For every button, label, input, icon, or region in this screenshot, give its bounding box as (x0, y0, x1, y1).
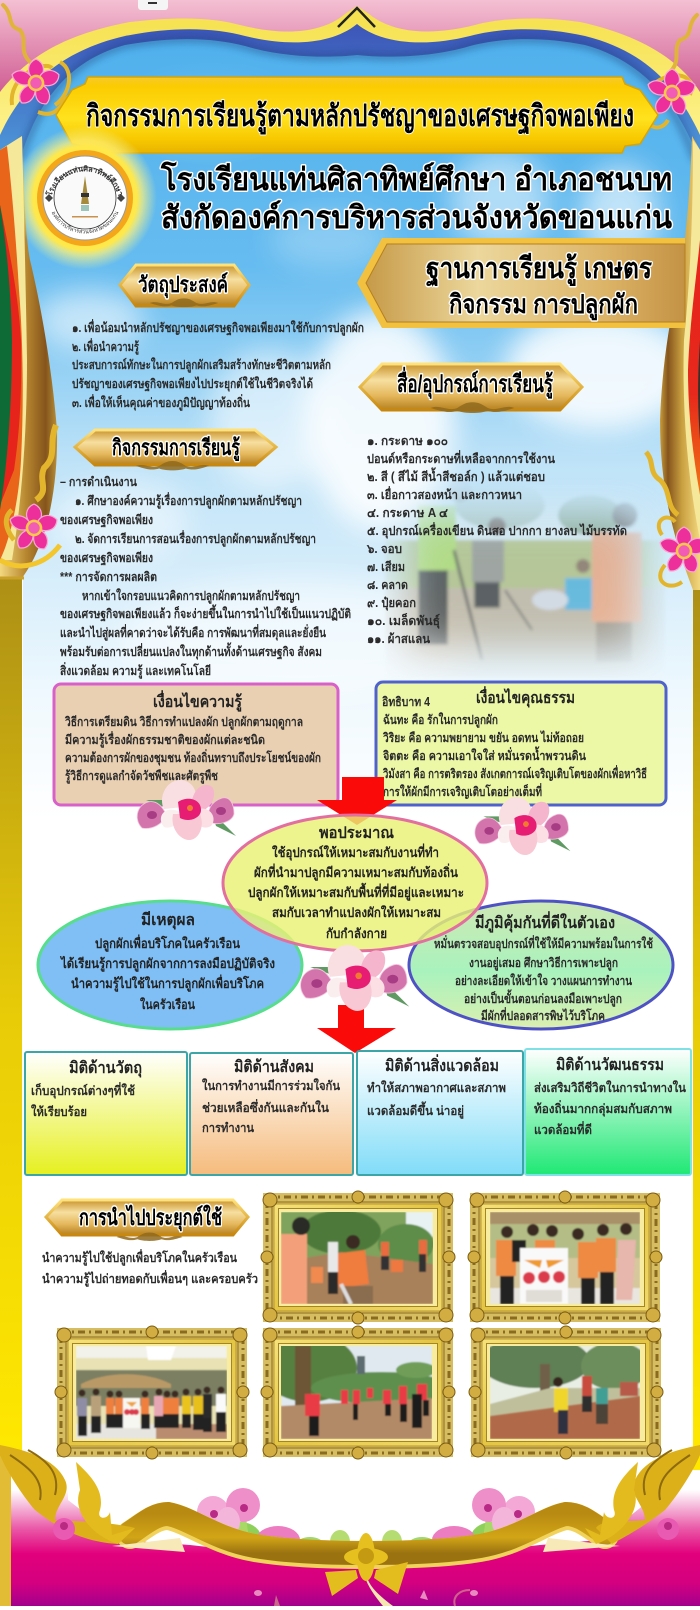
materials list: ๘. คลาด (367, 578, 408, 592)
top arch: yellow band (0, 6, 700, 160)
heading button: application: การนำไปประยุกต์ใช้ (79, 1204, 222, 1232)
cream highlights under rope (112, 1538, 620, 1552)
yellow ellipse: moderation: กับกำลังกาย (326, 926, 387, 941)
school logo: โรงเรียนแท่นศิลาทิพย์ศึกษา (45, 165, 122, 196)
morality text: การให้ผักมีการเจริญเติบโตอย่างเต็มที่ (383, 783, 542, 799)
materials list: ๑๑. ผ้าสแลน (367, 632, 430, 646)
arch peak chevron (338, 8, 375, 27)
right decorative side bands (660, 136, 700, 590)
top pink header band (0, 0, 700, 110)
yellow ellipse: moderation: ปลูกผักให้เหมาะสมกับพื้นที่ที่มีอยู่และเหมาะ (248, 882, 464, 901)
green ellipse: immunity (409, 901, 673, 1029)
reasoning text (59, 910, 275, 1012)
falling petals (254, 1590, 478, 1606)
knowledge text: ความต้องการผักของชุมชน ท้องถิ่นทราบถึงประโยชน์ของผัก (65, 749, 321, 766)
materials list: ๔. กระดาษ A ๔ (367, 506, 449, 520)
heading button: learning activities (75, 430, 276, 470)
activities text: ๑. ศึกษาองค์ความรู้เรื่องการปลูกผักตามหลักปรัชญา (75, 492, 302, 509)
gold rope garland (130, 1514, 605, 1555)
reasoning text: ได้เรียนรู้การปลูกผักจากการลงมือปฏิบัติจริง (59, 955, 275, 972)
school logo (22, 127, 156, 268)
school logo: องค์การบริหารส่วนจังหวัดขอนแก่น (52, 212, 118, 234)
arch inner shadow (20, 39, 695, 160)
bottom orchid bouquet right (382, 1488, 535, 1558)
icon: orchid right (475, 797, 570, 855)
application text: นำความรู้ไปใช้ปลูกเพื่อบริโภคในครัวเรือน (42, 1249, 237, 1266)
main title banner (56, 77, 658, 153)
card: culture dimension (525, 1049, 691, 1175)
card: culture dimension: ท้องถิ่นมากกลุ่มสมกับสภาพ (534, 1100, 672, 1117)
bottom orchid bouquet left (197, 1488, 350, 1558)
immunity text: มีผักที่ปลอดสารพิษไว้บริโภค (481, 1007, 605, 1023)
immunity text: งานอยู่เสมอ ศึกษาวิธีการเพาะปลูก (469, 956, 618, 971)
immunity text: มีภูมิคุ้มกันที่ดีในตัวเอง (475, 911, 615, 934)
materials list: ๑. กระดาษ ๑๐๐ (367, 434, 448, 448)
learning base banner: กิจกรรม การปลูกผัก (449, 289, 638, 321)
school name heading (160, 161, 672, 235)
icon: orchid centre (301, 945, 409, 1011)
activities text: พร้อมรับต่อการเปลี่ยนแปลงในทุกด้านทั้งด้านเศรษฐกิจ สังคม (60, 642, 322, 660)
materials list: ๓. เยื่อกาวสองหน้า และกาวหนา (367, 486, 522, 502)
morality title: เงื่อนไขคุณธรรม (476, 686, 575, 708)
reasoning text: ในครัวเรือน (140, 996, 195, 1012)
materials list: ๙. ปุ๋ยคอก (367, 596, 416, 611)
morality text: วิริยะ คือ ความพยายาม ขยัน อดทน ไม่ท้อถอย (382, 730, 584, 745)
reasoning text: ปลูกผักเพื่อบริโภคในครัวเรือน (95, 934, 240, 952)
card: culture dimension: มิติด้านวัฒนธรรม (556, 1056, 664, 1074)
morality text: อิทธิบาท 4 (382, 695, 430, 709)
heading button: learning media (360, 364, 582, 413)
activities text (60, 475, 351, 679)
card: social dimension: ช่วยเหลือซึ่งกันและกันใน (202, 1099, 329, 1115)
arrow: moderation down to dimensions (317, 1005, 396, 1053)
activities text: ๒. จัดการเรียนการสอนเรื่องการปลูกผักตามหลักปรัชญา (75, 530, 316, 547)
card: material dimension: ให้เรียบร้อย (31, 1104, 87, 1119)
heading button: application (46, 1200, 248, 1241)
materials list: ๕. อุปกรณ์เครื่องเขียน ดินสอ ปากกา ยางลบ ไม้บรรทัด (367, 522, 627, 539)
icon: pink flower right side (646, 452, 700, 586)
left yellow column (0, 578, 22, 1458)
knowledge text: รู้วิธีการดูแลกำจัดวัชพืชและศัตรูพืช (65, 769, 218, 784)
materials list (366, 434, 627, 646)
icon: pink flower top left (12, 59, 75, 114)
activities text: *** การจัดการผลผลิต (60, 570, 157, 584)
heading button: objectives: วัตถุประสงค์ (138, 272, 228, 299)
morality text: จิตตะ คือ ความเอาใจใส่ หมั่นรดน้ำพรวนดิน (382, 746, 586, 763)
right yellow column (693, 590, 700, 1470)
left thin gold strip (0, 1450, 11, 1606)
heading button: learning activities: กิจกรรมการเรียนรู้ (112, 435, 240, 462)
activities text: หากเข้าใจกรอบแนวคิดการปลูกผักตามหลักปรัชญา (82, 588, 300, 604)
school name heading: สังกัดองค์การบริหารส่วนจังหวัดขอนแก่น (161, 200, 672, 235)
card: social dimension (190, 1053, 353, 1175)
bottom magenta band (11, 1490, 700, 1606)
top mini tab (138, 0, 168, 10)
activities text: ของเศรษฐกิจพอเพียง (60, 513, 153, 528)
objectives text: ๑. เพื่อน้อมนำหลักปรัชญาของเศรษฐกิจพอเพียงมาใช้กับการปลูกผัก (72, 319, 364, 336)
card: social dimension: การทำงาน (202, 1121, 254, 1135)
morality text (382, 695, 647, 799)
card: social dimension: ในการทำงานมีการร่วมใจกัน (202, 1078, 340, 1093)
photo frame 1: students digging (261, 1191, 455, 1324)
activities text: ของเศรษฐกิจพอเพียงแล้ว ก็จะง่ายขึ้นในการนำไปใช้เป็นแนวปฏิบัติ (60, 604, 351, 622)
photo frame 3: group photo indoors (55, 1326, 249, 1459)
knowledge text: มีความรู้เรื่องผักธรรมชาติของผักแต่ละชนิด (65, 731, 265, 748)
card: environment dimension: มิติด้านสิ่งแวดล้อม (385, 1054, 499, 1075)
objectives text: ปรัชญาของเศรษฐกิจพอเพียงไปประยุกต์ใช้ในชีวิตจริงได้ (72, 376, 313, 392)
activities text: ของเศรษฐกิจพอเพียง (60, 551, 153, 566)
card: culture dimension: ส่งเสริมวิถีชีวิตในการนำทางใน (534, 1080, 686, 1095)
top arch: blue band (0, 24, 700, 170)
learning base banner (357, 238, 685, 328)
icon: orchid left (137, 780, 236, 840)
blue ellipse: reasoning (38, 901, 302, 1029)
panel: morality condition (376, 682, 666, 805)
objectives text: ๒. เพื่อนำความรู้ (72, 338, 139, 355)
knowledge text: วิธีการเตรียมดิน วิธีการทำแปลงผัก ปลูกผักตามฤดูกาล (64, 715, 303, 730)
materials list: ๑๐. เมล็ดพันธุ์ (367, 613, 440, 629)
faded photo behind materials list (385, 486, 664, 674)
sky background with clouds (23, 39, 693, 756)
card: material dimension (25, 1052, 187, 1175)
morality text: ฉันทะ คือ รักในการปลูกผัก (383, 712, 498, 728)
activities text: และนำไปสู่ผลที่คาดว่าจะได้รับคือ การพัฒนาที่สมดุลและยั่งยืน (60, 624, 326, 641)
photo frame 4: students in the field (261, 1326, 455, 1459)
arrow: conditions down to moderation (317, 777, 397, 825)
activities text: – การดำเนินงาน (60, 475, 137, 489)
left corner gold scroll top (3, 5, 697, 72)
centre gold bow (325, 1533, 408, 1606)
yellow ellipse: moderation: ผักที่นำมาปลูกมีความเหมาะสมกับท้องถิ่น (254, 863, 458, 881)
card: culture dimension: แวดล้อมที่ดี (534, 1121, 592, 1137)
application text (42, 1249, 258, 1287)
knowledge title: เงื่อนไขความรู้ (153, 690, 242, 713)
card: material dimension: มิติด้านวัตถุ (69, 1059, 142, 1078)
photo frame 2: students with poster (468, 1191, 662, 1324)
card: environment dimension: แวดล้อมดีขึ้น น่าอยู่ (367, 1101, 464, 1119)
white area above the rope (68, 1440, 650, 1553)
objectives text: ๓. เพื่อให้เห็นคุณค่าของภูมิปัญญาท้องถิ่น (72, 394, 250, 411)
materials list: ๗. เสียม (367, 560, 405, 574)
materials list: ๖. จอบ (366, 542, 402, 556)
activities text: สิ่งแวดล้อม ความรู้ และเทคโนโลยี (60, 662, 211, 679)
immunity text (434, 911, 653, 1023)
card: material dimension: เก็บอุปกรณ์ต่างๆที่ใช้ (31, 1082, 135, 1099)
objectives text: ประสบการณ์ทักษะในการปลูกผักเสริมสร้างทักษะชีวิตตามหลัก (72, 357, 331, 373)
yellow ellipse: moderation: สมกับเวลาทำแปลงผักให้เหมาะสม (272, 904, 441, 920)
immunity text: อย่างละเอียดให้เข้าใจ วางแผนการทำงาน (455, 973, 632, 988)
card: environment dimension: ทำให้สภาพอากาศและสภาพ (367, 1080, 506, 1095)
icon: pink flower left side (0, 425, 60, 578)
objectives text (72, 319, 364, 411)
naga ornament left (0, 1445, 135, 1544)
application text: นำความรู้ไปถ่ายทอดกับเพื่อนๆ และครอบครัว (42, 1270, 258, 1287)
knowledge text (64, 715, 321, 784)
heading button: learning media: สื่อ/อุปกรณ์การเรียนรู้ (397, 366, 553, 400)
materials list: ปอนด์หรือกระดาษที่เหลือจากการใช้งาน (367, 450, 555, 466)
panel: knowledge condition (54, 684, 338, 805)
yellow ellipse: moderation (223, 815, 487, 951)
yellow ellipse: moderation: ใช้อุปกรณ์ให้เหมาะสมกับงานที่ทำ (272, 843, 439, 861)
yellow ellipse: moderation: พอประมาณ (319, 825, 394, 842)
card: social dimension: มิติด้านสังคม (234, 1058, 314, 1076)
reasoning text: มีเหตุผล (141, 910, 195, 930)
naga ornament right (585, 1445, 700, 1544)
reasoning text: นำความรู้ไปใช้ในการปลูกผักเพื่อบริโภค (71, 974, 264, 992)
photo frame 5: digging under the trees (469, 1326, 663, 1459)
learning base banner: ฐานการเรียนรู้ เกษตร (426, 253, 652, 287)
materials list: ๒. สี ( สีไม้ สีน้ำสีชอล์ก ) แล้วแต่ชอบ (367, 467, 545, 484)
card: environment dimension (357, 1051, 523, 1175)
icon: pink flower top right (647, 69, 695, 127)
heading button: objectives (120, 265, 249, 307)
left decorative side bands (0, 136, 57, 578)
immunity text: อย่างเป็นขั้นตอนก่อนลงมือเพาะปลูก (464, 989, 622, 1007)
bottom strip (0, 1606, 700, 1610)
school name heading: โรงเรียนแท่นศิลาทิพย์ศึกษา อำเภอชนบท (160, 161, 672, 197)
